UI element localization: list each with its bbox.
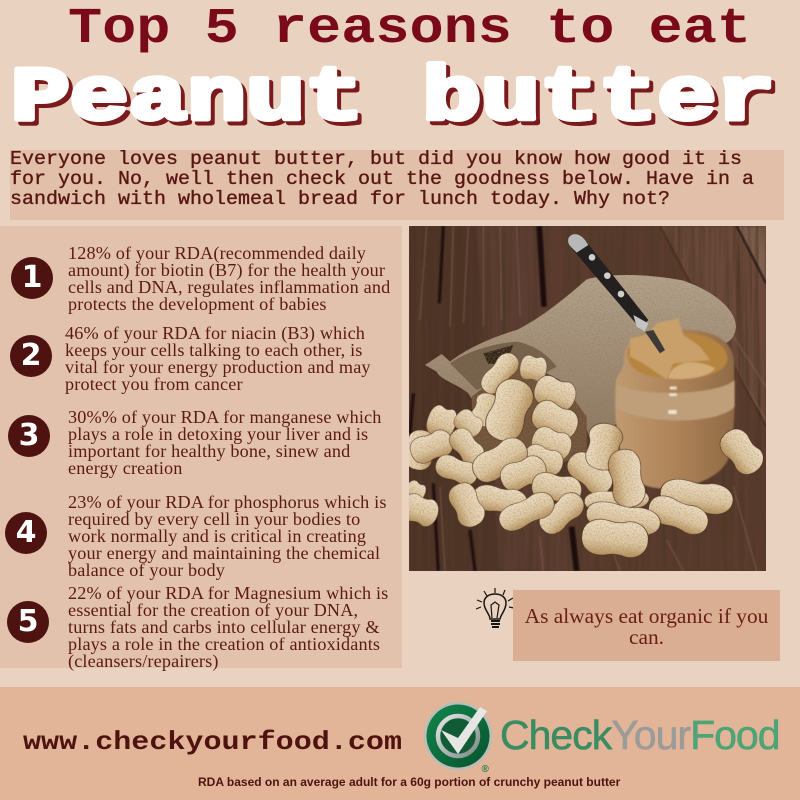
reason 2 text: protect you from cancer xyxy=(65,374,243,394)
intro text: for you. No, well then check out the goodness below. Have in a xyxy=(10,168,754,190)
logo wordmark: CheckYourFood xyxy=(500,712,780,758)
photo: peanuts and jar of peanut butter xyxy=(409,226,766,571)
reason 2 text: vital for your energy production and may xyxy=(65,357,371,377)
reason 3 text: energy creation xyxy=(68,458,183,478)
icon: light bulb xyxy=(476,588,513,628)
reason 2 text: keeps your cells talking to each other, is xyxy=(65,340,362,360)
reason 2 text: 46% of your RDA for niacin (B3) which xyxy=(65,323,365,343)
reason 3 text: 30%% of your RDA for manganese which xyxy=(68,407,382,427)
footer band xyxy=(0,687,800,800)
reason 5 text: turns fats and carbs into cellular energy & xyxy=(68,617,380,637)
reason 3 text xyxy=(68,407,382,478)
number 1: 1 xyxy=(22,260,42,295)
panel: five reasons xyxy=(0,226,402,668)
jar xyxy=(615,318,735,488)
footnote: RDA based on an average adult for a 60g portion of crunchy peanut butter xyxy=(198,775,620,789)
spoon xyxy=(568,234,665,353)
reason 4 text: balance of your body xyxy=(68,560,225,580)
reason 1 text: amount) for biotin (B7) for the health your xyxy=(68,260,385,280)
number 5: 5 xyxy=(18,604,38,639)
reason 4 text: work normally and is critical in creating xyxy=(68,526,366,546)
reason 1 text xyxy=(68,243,390,314)
reason 2 text xyxy=(65,323,371,394)
reason 4 text: 23% of your RDA for phosphorus which is xyxy=(68,492,387,512)
burlap sack xyxy=(425,275,736,443)
number 3: 3 xyxy=(19,418,39,453)
reason 3 text: important for healthy bone, sinew and xyxy=(68,441,350,461)
reason 5 text: essential for the creation of your DNA, xyxy=(68,600,358,620)
reason 4 text xyxy=(68,492,387,580)
number 2 xyxy=(10,335,52,377)
reason 5 text: plays a role in the creation of antioxidants xyxy=(68,634,380,654)
wood xyxy=(409,226,766,571)
callout: eat organic xyxy=(513,590,780,661)
reason 4 text: required by every cell in your bodies to xyxy=(68,509,360,529)
number 1 xyxy=(11,257,53,299)
icon: CheckYourFood logo xyxy=(424,702,492,775)
callout text: can. xyxy=(629,624,664,648)
number 3 xyxy=(8,415,50,457)
callout text: As always eat organic if you xyxy=(525,604,768,628)
panel: intro xyxy=(10,150,784,220)
reason 5 text xyxy=(68,583,388,671)
reason 1 text: 128% of your RDA(recommended daily xyxy=(68,243,366,263)
number 4: 4 xyxy=(16,515,36,550)
reason 3 text: plays a role in detoxing your liver and is xyxy=(68,424,368,444)
number 4 xyxy=(5,512,47,554)
reason 1 text: cells and DNA, regulates inflammation and xyxy=(68,277,390,297)
reason 4 text: your energy and maintaining the chemical xyxy=(68,543,380,563)
peanuts xyxy=(398,348,769,559)
icon: CheckYourFood logo: ® xyxy=(482,764,490,775)
intro text xyxy=(10,148,754,210)
intro text: sandwich with wholemeal bread for lunch today. Why not? xyxy=(10,188,670,210)
reason 1 text: protects the development of babies xyxy=(68,294,327,314)
number 2: 2 xyxy=(21,338,41,373)
reason 5 text: (cleansers/repairers) xyxy=(68,651,219,671)
number 5 xyxy=(7,601,49,643)
website address: www.checkyourfood.com xyxy=(23,727,402,757)
callout text xyxy=(524,604,768,648)
reason 5 text: 22% of your RDA for Magnesium which is xyxy=(68,583,388,603)
